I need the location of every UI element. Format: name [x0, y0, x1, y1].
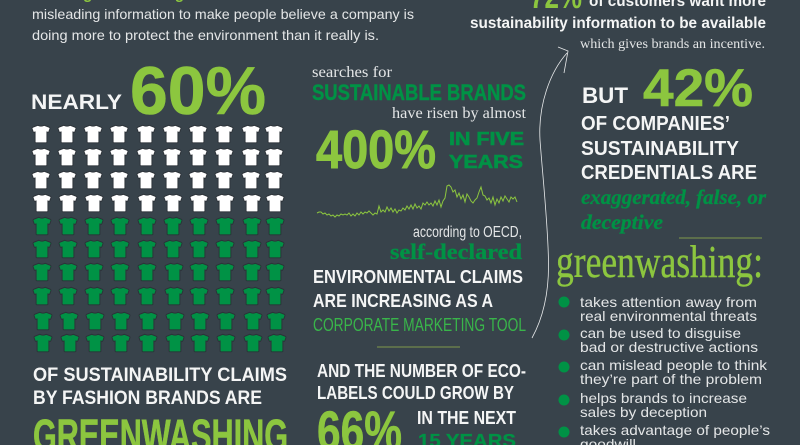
text: eco-labels growth: IN THE NEXT — [417, 408, 516, 428]
bullet 4 — [558, 390, 747, 420]
bullet list — [558, 294, 770, 445]
bullet 5: takes advantage of people’s — [580, 422, 770, 438]
statistic: 400% in five years: YEARS — [449, 152, 523, 172]
heading: nearly 60% — [31, 53, 266, 129]
statistic: 42% of companies: BUT — [582, 83, 629, 108]
pictogram: 100 shirts, 40 white and 60 green — [32, 125, 286, 352]
intro text block — [32, 0, 414, 43]
customer statistic block — [470, 0, 766, 52]
statistic: 42% of companies: OF COMPANIES’ — [581, 113, 730, 135]
bullet 2 — [558, 325, 758, 355]
bullet 2: bad or destructive actions — [580, 339, 758, 355]
statistic: 400% in five years: IN FIVE — [449, 129, 524, 149]
white shirts — [32, 125, 284, 212]
text: searches for sustainable brands: searches for — [312, 64, 393, 81]
bullet 3: they’re part of the problem — [580, 371, 762, 387]
line chart: search trend — [317, 185, 517, 217]
green shirts — [33, 217, 286, 352]
customer statistic block: which gives brands an incentive. — [580, 37, 765, 52]
text: OECD environmental claims: CORPORATE MARKETING TOOL — [313, 315, 526, 335]
statistic: 42% of companies: SUSTAINABILITY — [581, 138, 740, 160]
bullet 1 — [558, 294, 757, 324]
bullet 4: sales by deception — [580, 404, 707, 420]
text: eco-labels growth — [317, 361, 526, 445]
intro text block: doing more to protect the environment than it really is. — [32, 27, 379, 43]
statistic: 42% of companies: 42% — [643, 59, 753, 118]
text: OECD environmental claims: according to OECD, — [413, 224, 522, 241]
text: sustainability claims are greenwashing: BY FASHION BRANDS ARE — [33, 388, 262, 409]
text: searches for sustainable brands: have risen by almost — [392, 105, 527, 122]
heading: nearly 60%: 60% — [130, 53, 266, 129]
text: sustainability claims are greenwashing: OF SUSTAINABILITY CLAIMS — [33, 365, 287, 386]
statistic: 400% in five years — [316, 120, 524, 180]
text: eco-labels growth: LABELS COULD GROW BY — [317, 383, 514, 403]
heading: nearly 60%: NEARLY — [31, 91, 122, 114]
text: OECD environmental claims: ENVIRONMENTAL CLAIMS — [313, 267, 523, 287]
bullet 4: helps brands to increase — [580, 390, 747, 406]
bullet 2: can be used to disguise — [580, 325, 741, 341]
statistic: 42% of companies — [581, 59, 767, 234]
text: eco-labels growth: AND THE NUMBER OF ECO- — [317, 361, 526, 381]
customer statistic block: sustainability information to be available — [470, 15, 766, 32]
statistic: 42% of companies: CREDENTIALS ARE — [581, 162, 757, 184]
bullet 1: takes attention away from — [580, 294, 757, 310]
bullet 3 — [558, 357, 768, 387]
bullet 5 — [558, 422, 770, 445]
statistic: 42% of companies: exaggerated, false, or — [581, 185, 767, 209]
statistic: 400% in five years: 400% — [316, 120, 436, 180]
statistic: 42% of companies: deceptive — [581, 210, 663, 234]
text: sustainability claims are greenwashing — [33, 365, 288, 445]
text: OECD environmental claims: ARE INCREASING AS A — [313, 291, 493, 311]
text: OECD environmental claims: self-declared — [390, 239, 522, 264]
text: searches for sustainable brands: SUSTAINABLE BRANDS — [312, 80, 526, 105]
intro text block: misleading information to make people believe a company is — [32, 6, 414, 22]
bullet 1: real environmental threats — [580, 308, 757, 324]
arrow: hand-drawn curve — [532, 47, 568, 338]
bullet 3: can mislead people to think — [580, 357, 768, 373]
text: searches for sustainable brands — [312, 64, 527, 122]
text: OECD environmental claims — [313, 224, 526, 335]
